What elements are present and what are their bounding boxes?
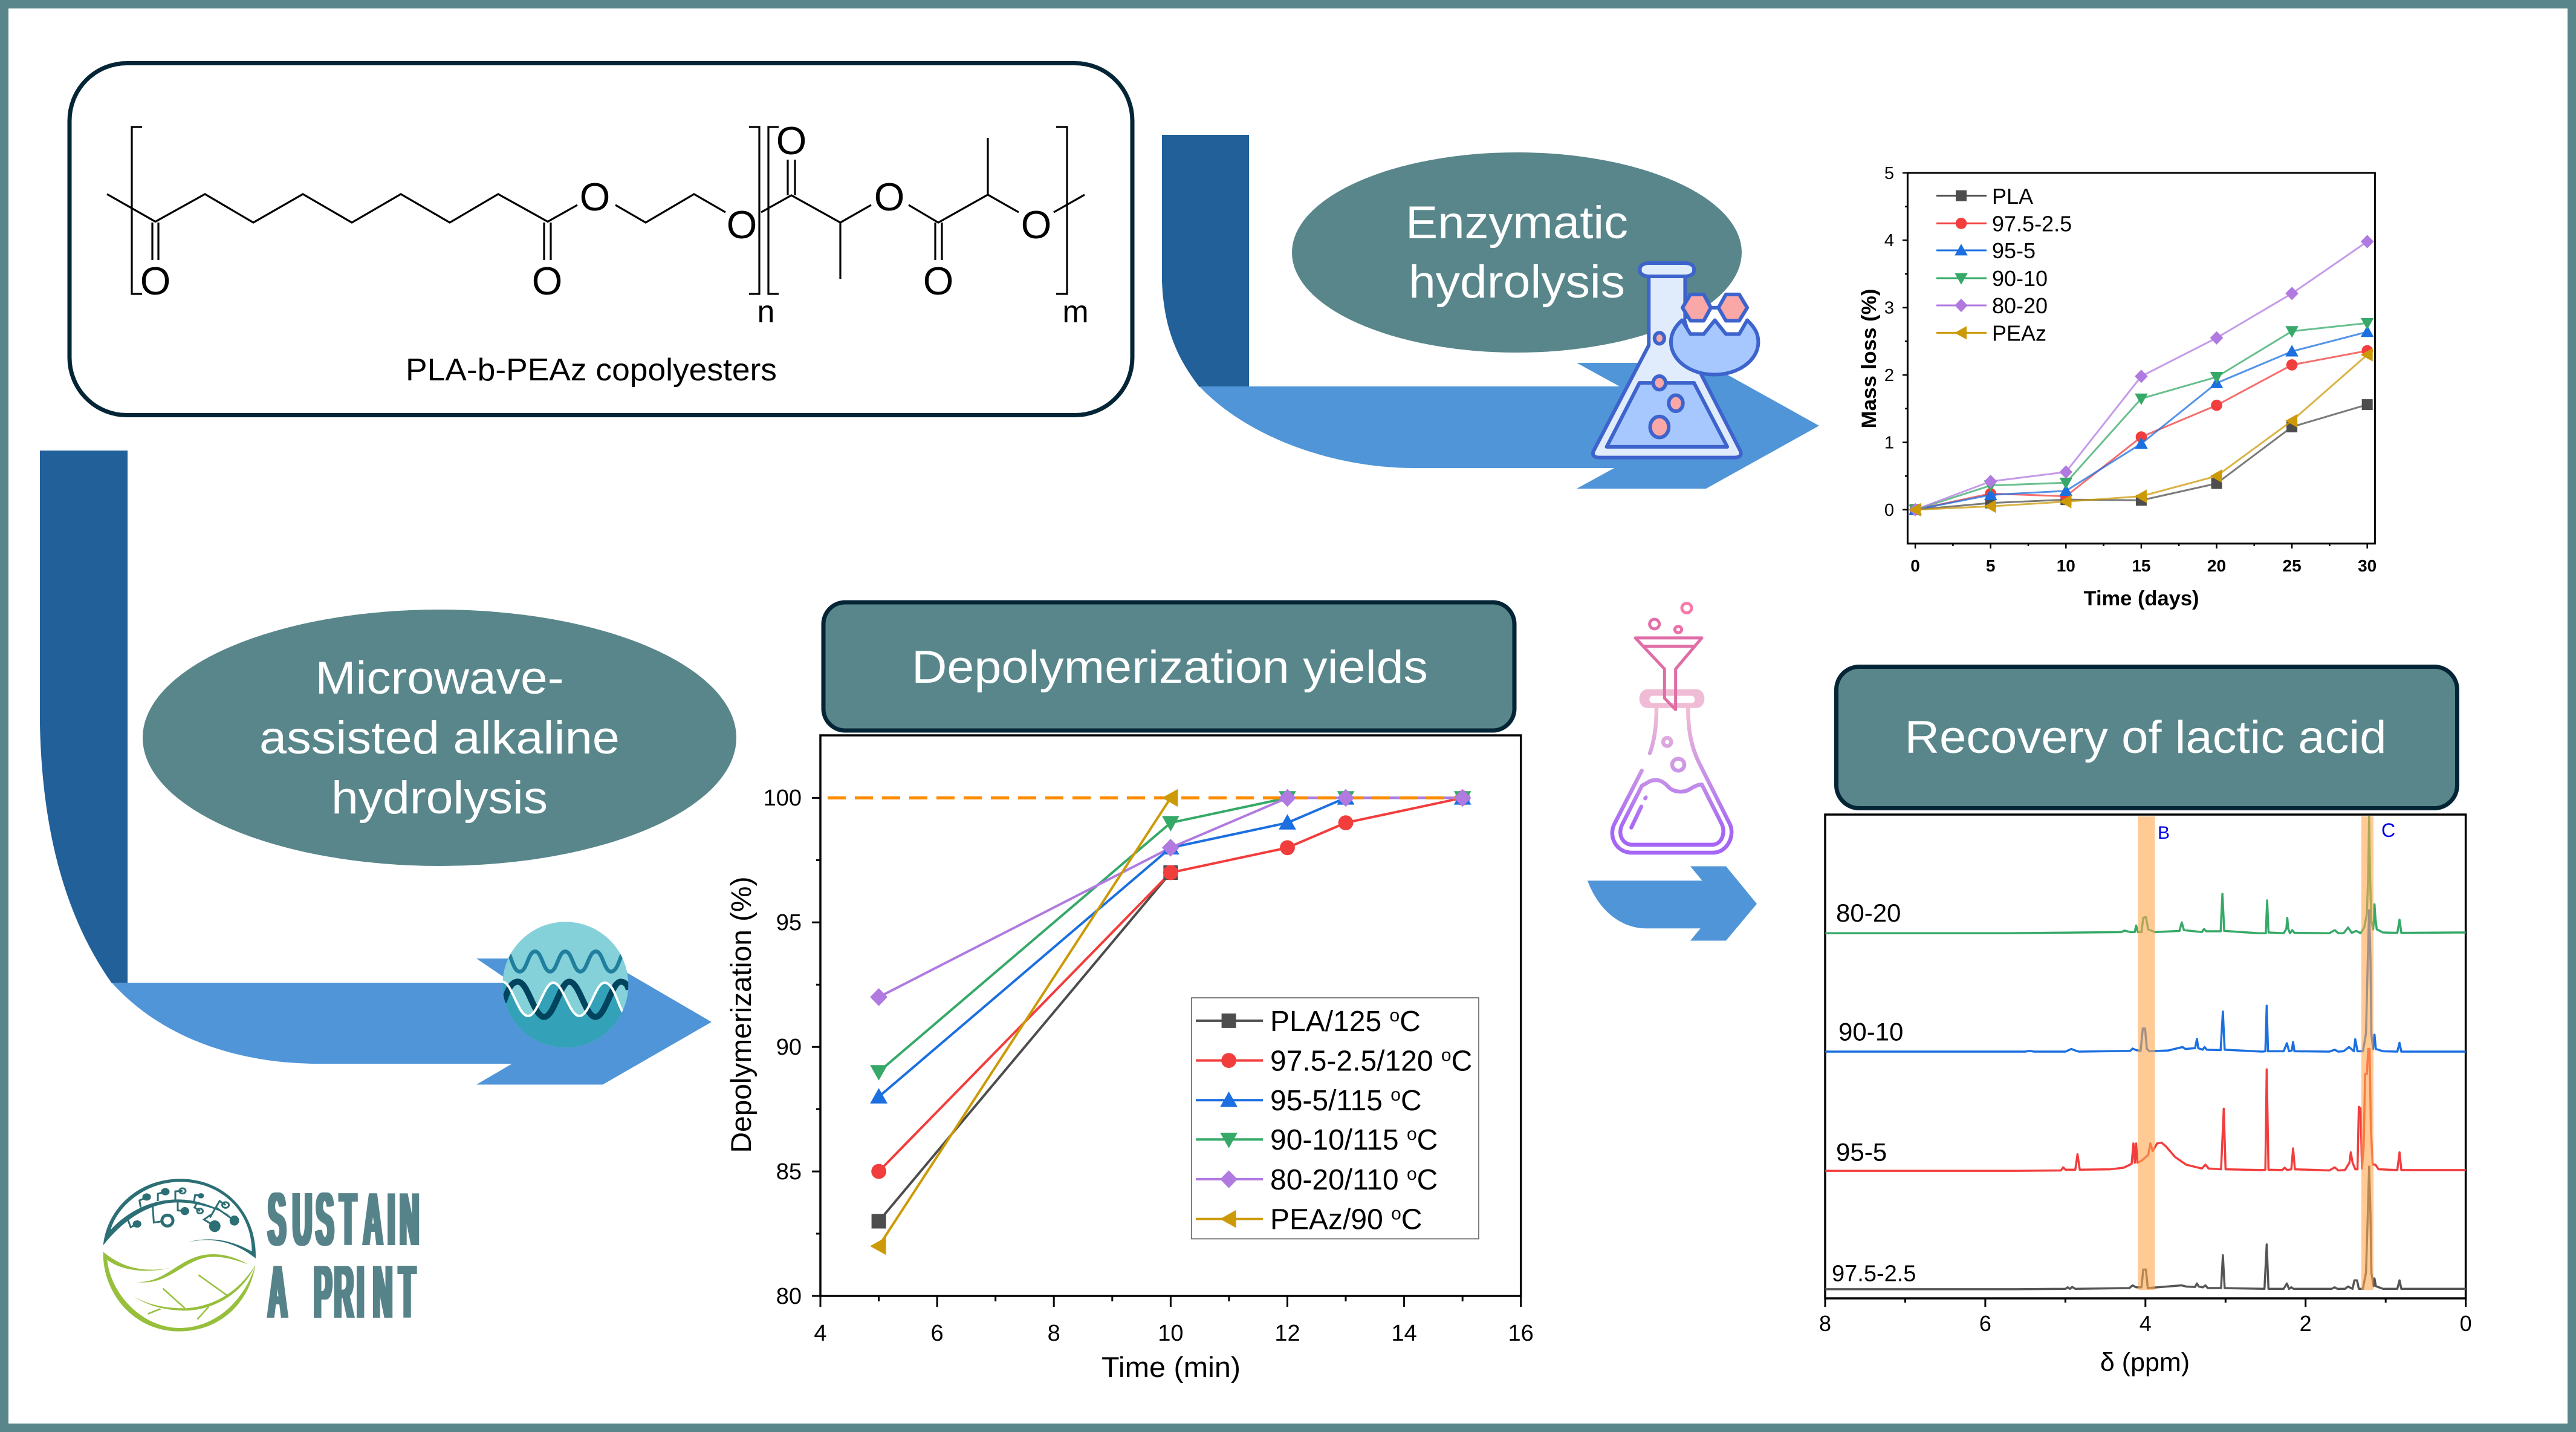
chemical structure (107, 119, 1089, 330)
logo wordmark: SUSTAIN (268, 1177, 419, 1261)
NMR axes: 6 (1979, 1311, 1991, 1336)
chemical structure: O (580, 175, 610, 219)
panel: polymer structure (70, 63, 1132, 415)
depolymerization legend: o (1441, 1045, 1452, 1066)
NMR axes: 4 (2140, 1311, 2152, 1336)
trace labels: 97.5-2.5 (1832, 1261, 1916, 1287)
mass loss axes: 0 (1884, 501, 1894, 520)
enzymatic hydrolysis bubble: Enzymatic (1406, 197, 1628, 249)
depolymerization axes: 4 (814, 1321, 827, 1346)
depolymerization legend: PEAz/90 (1270, 1203, 1383, 1236)
arrow: enzymatic route (1162, 135, 1819, 489)
icon: enzyme flask (1593, 263, 1758, 458)
mass loss legend: 80-20 (1992, 293, 2048, 318)
trace labels (1832, 899, 1916, 1287)
depolymerization axes: 90 (776, 1035, 802, 1060)
mass loss axes: 0 (1910, 556, 1920, 575)
microwave hydrolysis bubble (143, 610, 736, 866)
chart: mass loss (1858, 164, 2376, 610)
chemical structure: O (532, 259, 562, 303)
NMR axes: 8 (1819, 1311, 1831, 1336)
depolymerization legend: C (1452, 1045, 1472, 1078)
logo wordmark: A PRINT (268, 1250, 415, 1334)
chart: NMR spectra (1819, 815, 2472, 1377)
depolymerization axes: 85 (776, 1159, 802, 1185)
mass loss legend: PEAz (1992, 321, 2046, 346)
depolymerization legend: 95-5/115 (1270, 1085, 1383, 1117)
NMR axes (1819, 815, 2472, 1377)
band labels: B (2158, 823, 2170, 843)
depolymerization axes: 14 (1391, 1321, 1417, 1346)
mass loss axes: Time (days) (2083, 587, 2199, 610)
microwave hydrolysis bubble: Microwave- (316, 653, 563, 704)
depolymerization legend: C (1400, 1006, 1421, 1038)
chemical structure: O (923, 259, 953, 303)
depolymerization axes: Time (min) (1101, 1351, 1241, 1383)
mass loss legend: 97.5-2.5 (1992, 212, 2072, 236)
depolymerization legend: C (1401, 1085, 1422, 1117)
mass loss series (1915, 242, 2367, 510)
mass loss axes: 1 (1884, 433, 1894, 452)
depolymerization axes (725, 735, 1534, 1383)
mass loss axes: 5 (1986, 556, 1995, 575)
mass loss legend: 90-10 (1992, 266, 2048, 291)
mass loss axes: 4 (1884, 231, 1894, 250)
chemical structure: O (776, 119, 806, 163)
depolymerization axes: 80 (776, 1284, 802, 1309)
band labels: C (2381, 819, 2395, 841)
depolymerization axes: 12 (1274, 1321, 1300, 1346)
mass loss axes: 30 (2358, 556, 2376, 575)
microwave hydrolysis bubble: hydrolysis (331, 772, 548, 824)
depolymerization axes: 16 (1508, 1321, 1534, 1346)
depolymerization legend: o (1391, 1203, 1401, 1224)
NMR axes: 2 (2300, 1311, 2312, 1336)
depolymerization legend: o (1407, 1164, 1417, 1184)
depolymerization legend: o (1389, 1006, 1400, 1026)
depolymerization legend (1192, 998, 1479, 1239)
heading: depolymerization yields (823, 602, 1514, 731)
trace labels: 95-5 (1836, 1138, 1887, 1166)
mass loss axes: 25 (2283, 556, 2302, 575)
mass loss axes: 20 (2207, 556, 2226, 575)
trace labels: 80-20 (1836, 899, 1901, 927)
logo wordmark (268, 1177, 419, 1334)
microwave hydrolysis bubble: assisted alkaline (259, 712, 620, 764)
depolymerization series (828, 798, 1462, 1246)
depolymerization axes: 8 (1048, 1321, 1060, 1346)
mass loss legend: PLA (1992, 184, 2033, 209)
depolymerization legend: 97.5-2.5/120 (1270, 1045, 1433, 1078)
arrow: microwave route (40, 451, 712, 1085)
mass loss axes: 5 (1884, 164, 1894, 183)
band labels (2158, 819, 2395, 843)
depolymerization legend: 90-10/115 (1270, 1124, 1399, 1156)
mass loss legend (1936, 184, 2072, 346)
enzymatic hydrolysis bubble (1292, 152, 1742, 353)
polymer name: PLA-b-PEAz copolyesters (406, 353, 777, 388)
depolymerization axes: 95 (776, 910, 802, 936)
heading: recovery of lactic acid (1837, 666, 2457, 808)
logo: Sustain a Print (103, 1177, 419, 1334)
depolymerization legend: C (1401, 1203, 1422, 1236)
chemical structure: O (1021, 203, 1051, 247)
depolymerization legend: C (1417, 1164, 1438, 1196)
mass loss axes: 3 (1884, 299, 1894, 318)
depolymerization legend: 80-20/110 (1270, 1164, 1399, 1196)
icon: microwave waves (500, 922, 631, 1050)
depolymerization legend: o (1407, 1124, 1417, 1144)
depolymerization legend: PLA/125 (1270, 1006, 1381, 1038)
heading: depolymerization yields: Depolymerization yields (912, 642, 1428, 693)
NMR traces (1825, 817, 2466, 1289)
highlighted bands (2138, 816, 2373, 1290)
chemical structure: O (727, 203, 757, 247)
depolymerization axes: 100 (764, 786, 802, 811)
logo mark (103, 1179, 256, 1332)
chemical structure: n (758, 295, 774, 330)
icon: filtration flask (1612, 604, 1731, 853)
chemical structure: m (1062, 295, 1089, 330)
depolymerization axes: 10 (1158, 1321, 1184, 1346)
depolymerization axes: 6 (931, 1321, 944, 1346)
heading: recovery of lactic acid: Recovery of lactic acid (1904, 712, 2387, 763)
NMR axes: 0 (2460, 1311, 2472, 1336)
mass loss axes: 10 (2057, 556, 2075, 575)
mass loss axes: Mass loss (%) (1858, 289, 1881, 428)
mass loss axes: 15 (2132, 556, 2150, 575)
depolymerization legend: o (1390, 1085, 1401, 1105)
chemical structure: O (874, 175, 904, 219)
NMR axes: δ (ppm) (2100, 1348, 2190, 1377)
enzymatic hydrolysis bubble: hydrolysis (1409, 256, 1625, 308)
chart: depolymerization (725, 735, 1534, 1383)
depolymerization legend: C (1417, 1124, 1438, 1156)
mass loss axes: 2 (1884, 366, 1894, 385)
arrow: to recovery (1588, 867, 1757, 940)
mass loss axes (1858, 164, 2376, 610)
trace labels: 90-10 (1838, 1017, 1903, 1046)
depolymerization axes: Depolymerization (%) (725, 877, 757, 1153)
mass loss legend: 95-5 (1992, 238, 2036, 263)
chemical structure: O (140, 259, 170, 303)
